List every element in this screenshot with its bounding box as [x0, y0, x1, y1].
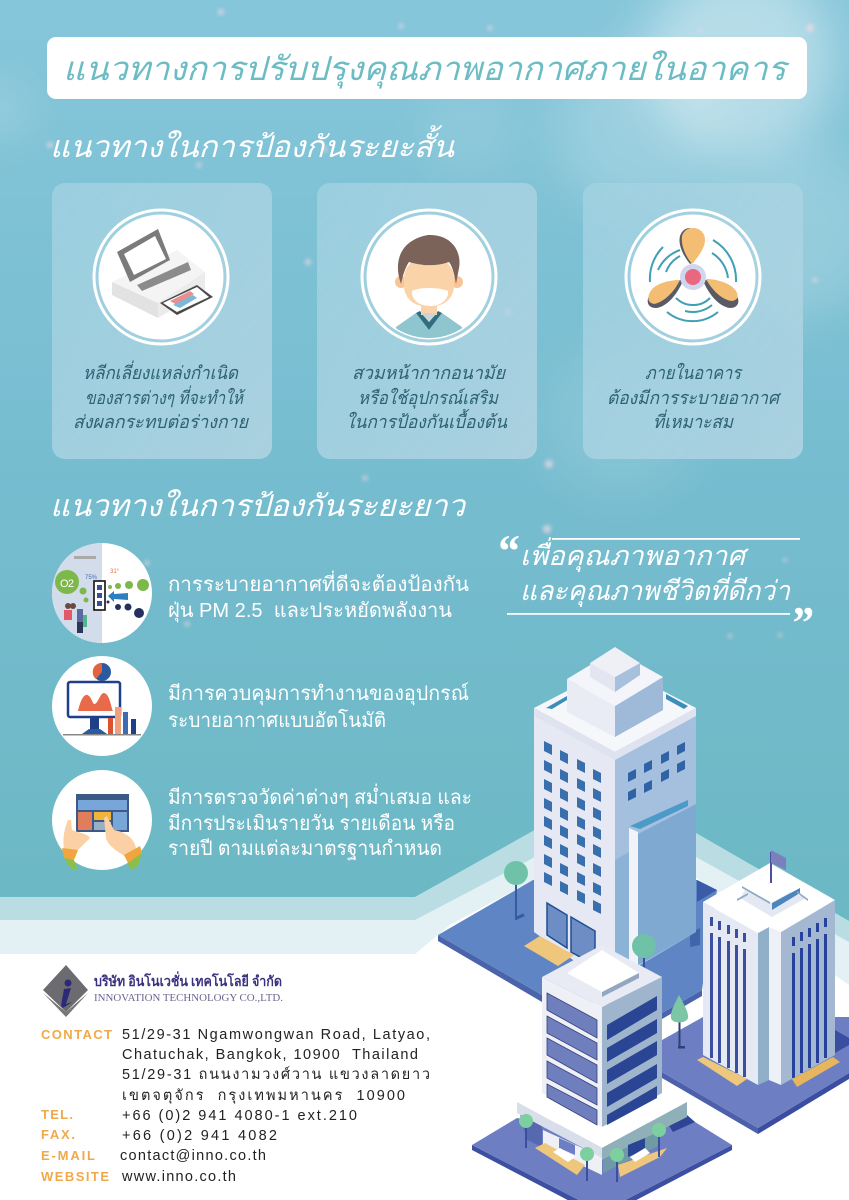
- contact details: Chatuchak, Bangkok, 10900 Thailand: [122, 1047, 418, 1063]
- icon: air filtration: [50, 543, 152, 643]
- panel: ventilation: [583, 183, 803, 459]
- contact labels: TEL.: [41, 1107, 73, 1122]
- icon: air filtration: 75%: [85, 575, 98, 581]
- contact labels: CONTACT: [41, 1027, 112, 1042]
- right building: [697, 850, 840, 1087]
- contact details: +66 (0)2 941 4082: [122, 1128, 277, 1144]
- small building: [542, 945, 662, 1127]
- panel: wear mask: [317, 183, 537, 459]
- left floors: [547, 993, 597, 1125]
- company logo: INNOVATION TECHNOLOGY CO.,LTD.: [94, 992, 283, 1004]
- quote: เพื่อคุณภาพอากาศ: [520, 537, 749, 573]
- right platform: [662, 1017, 849, 1134]
- small trees: [519, 1114, 666, 1182]
- pillars: [710, 917, 746, 1077]
- company logo: บริษัท อินโนเวชั่น เทคโนโลยี จำกัด: [94, 971, 282, 990]
- icon: air filtration: O2: [60, 578, 74, 590]
- caption: ต้องมีการระบายอากาศ: [607, 388, 781, 408]
- contact labels: [41, 1027, 112, 1184]
- contact labels: FAX.: [41, 1127, 75, 1142]
- title banner: [47, 37, 807, 99]
- caption: ส่งผลกระทบต่อร่างกาย: [73, 412, 249, 432]
- caption: [346, 363, 508, 432]
- window grid: [544, 741, 601, 914]
- quote: “: [496, 525, 519, 576]
- icon: tablet with hands: [52, 770, 152, 870]
- contact details: เขตจตุจักร กรุงเทพมหานคร 10900: [122, 1088, 405, 1104]
- heading: long term: แนวทางในการป้องกันระยะยาว: [50, 489, 467, 523]
- description: [168, 682, 469, 732]
- pine tree: [671, 995, 688, 1048]
- description: รายปี ตามแต่ละมาตรฐานกำหนด: [168, 838, 442, 860]
- long-term item 2: [52, 656, 469, 756]
- caption: หลีกเลี่ยงแหล่งกำเนิด: [83, 360, 239, 383]
- description: ฝุ่น PM 2.5 และประหยัดพลังงาน: [168, 600, 452, 623]
- side slab: [630, 800, 688, 829]
- podium: [517, 1060, 687, 1177]
- panel: avoid sources: [52, 183, 272, 459]
- caption: ที่เหมาะสม: [653, 409, 734, 432]
- illustration: isometric city: [438, 647, 849, 1200]
- contact details: contact@inno.co.th: [120, 1148, 266, 1164]
- company logo: [43, 965, 283, 1017]
- contact labels: WEBSITE: [41, 1169, 109, 1184]
- contact details: [120, 1027, 430, 1185]
- quote: ”: [790, 597, 813, 648]
- caption: ของสารต่างๆ ที่จะทำให้: [85, 385, 246, 408]
- icon: printer: [94, 210, 228, 344]
- tall building: [524, 647, 696, 990]
- contact details: 51/29-31 Ngamwongwan Road, Latyao,: [122, 1027, 430, 1043]
- caption: [607, 362, 781, 432]
- caption: [73, 360, 249, 432]
- icon: fan: [626, 210, 760, 344]
- tree: [632, 934, 656, 969]
- quote: และคุณภาพชีวิตที่ดีกว่า: [520, 572, 791, 608]
- caption: ภายในอาคาร: [645, 362, 743, 383]
- quote: [496, 525, 813, 648]
- back platform: [438, 880, 717, 1019]
- icon: monitor with charts: [52, 656, 152, 756]
- tree: [504, 861, 528, 920]
- description: ระบายอากาศแบบอัตโนมัติ: [168, 709, 386, 732]
- doors: [547, 903, 567, 948]
- right floors: [607, 996, 657, 1125]
- contact details: 51/29-31 ถนนงามวงศ์วาน แขวงลาดยาว: [122, 1066, 430, 1083]
- icon: air filtration: 31°: [110, 569, 120, 575]
- contact labels: E-MAIL: [41, 1148, 95, 1163]
- front platform: [472, 1115, 732, 1200]
- long-term item 3: [52, 770, 472, 870]
- description: มีการประเมินรายวัน รายเดือน หรือ: [168, 813, 455, 835]
- title banner: แนวทางการปรับปรุงคุณภาพอากาศภายในอาคาร: [63, 50, 790, 89]
- contact details: +66 (0)2 941 4080-1 ext.210: [122, 1108, 357, 1124]
- contact details: www.inno.co.th: [121, 1169, 236, 1185]
- icon: person with mask: [362, 210, 496, 345]
- description: มีการควบคุมการทำงานของอุปกรณ์: [168, 682, 469, 706]
- description: มีการตรวจวัดค่าต่างๆ สม่ำเสมอ และ: [168, 783, 472, 809]
- caption: สวมหน้ากากอนามัย: [352, 363, 506, 383]
- caption: ในการป้องกันเบื้องต้น: [346, 408, 508, 432]
- description: [168, 783, 472, 860]
- caption: หรือใช้อุปกรณ์เสริม: [358, 387, 499, 409]
- description: [168, 570, 469, 623]
- long-term item 1: [50, 543, 469, 643]
- description: การระบายอากาศที่ดีจะต้องป้องกัน: [168, 570, 469, 596]
- heading: short term: แนวทางในการป้องกันระยะสั้น: [50, 125, 456, 164]
